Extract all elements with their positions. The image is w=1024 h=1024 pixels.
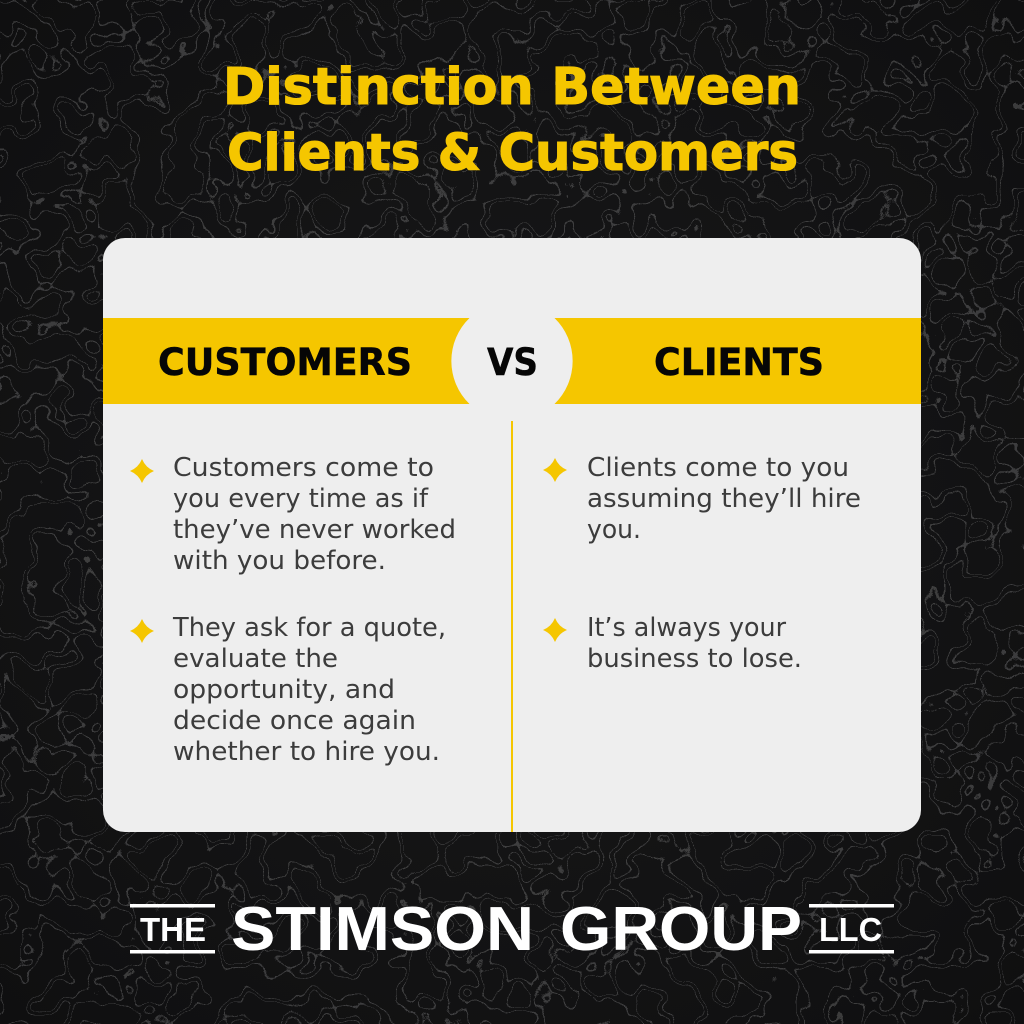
text: clients point 2 [587, 613, 802, 674]
panel: comparison card [103, 238, 921, 832]
text: customers point 2: They ask for a quote, [172, 613, 446, 643]
banner: clients: CLIENTS [654, 341, 824, 384]
text: customers point 1: with you before. [173, 546, 386, 576]
text: customers point 1 [173, 453, 456, 576]
column divider [511, 421, 513, 832]
title: Distinction Between [223, 58, 801, 117]
text: clients point 2: business to lose. [587, 644, 802, 674]
logo: The Stimson Group LLC [130, 895, 894, 964]
icon: star bullet customers 1 [130, 459, 154, 483]
text: customers point 1: you every time as if [173, 484, 429, 514]
text: clients point 2: It’s always your [587, 613, 787, 643]
logo: The Stimson Group LLC: GROUP [560, 895, 802, 964]
logo: The Stimson Group LLC: THE [140, 911, 206, 948]
icon: star bullet clients 2 [543, 618, 567, 642]
text: clients point 1: you. [587, 515, 641, 545]
text: clients point 1: assuming they’ll hire [587, 484, 861, 514]
text: customers point 2 [172, 613, 446, 767]
text: customers point 2: evaluate the [173, 644, 338, 674]
text: customers point 2: whether to hire you. [173, 737, 440, 767]
logo: The Stimson Group LLC: STIMSON [231, 895, 534, 964]
banner: clients [554, 318, 921, 404]
text: customers point 2: decide once again [173, 706, 416, 736]
text: customers point 1: Customers come to [173, 453, 434, 483]
icon: star bullet clients 1 [543, 458, 567, 482]
title [223, 58, 801, 183]
logo: The Stimson Group LLC: LLC [819, 911, 882, 948]
vs label: VS [487, 341, 538, 384]
banner: customers [103, 318, 470, 404]
text: customers point 1: they’ve never worked [173, 515, 456, 545]
banner: customers: CUSTOMERS [158, 341, 412, 384]
title: Clients & Customers [227, 124, 798, 183]
text: customers point 2: opportunity, and [173, 675, 395, 705]
icon: star bullet customers 2 [130, 619, 154, 643]
text: clients point 1: Clients come to you [587, 453, 849, 483]
text: clients point 1 [587, 453, 861, 545]
